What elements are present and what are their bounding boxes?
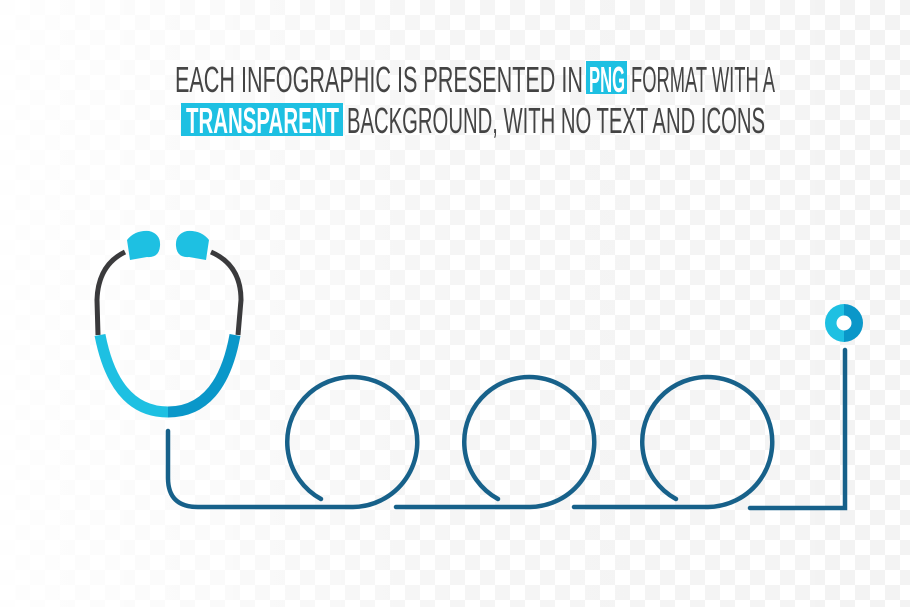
tube with loops	[168, 350, 845, 508]
title line 1: EACH INFOGRAPHIC IS PRESENTED IN	[175, 59, 583, 100]
final line	[750, 350, 845, 508]
title line 1: PNG	[589, 59, 625, 100]
title line 1: FORMAT WITH A	[631, 59, 775, 100]
title line 2	[181, 100, 765, 141]
title	[175, 59, 775, 141]
loop 2	[396, 377, 594, 507]
loop 1	[168, 377, 417, 507]
loop 3	[574, 377, 772, 507]
chest piece cyan U	[100, 335, 168, 412]
title line 2: TRANSPARENT	[186, 100, 339, 141]
stethoscope	[97, 231, 241, 412]
dark tubes	[97, 252, 125, 335]
earpiece left	[127, 231, 160, 260]
earpiece right	[176, 231, 209, 260]
end ring icon	[825, 304, 863, 342]
